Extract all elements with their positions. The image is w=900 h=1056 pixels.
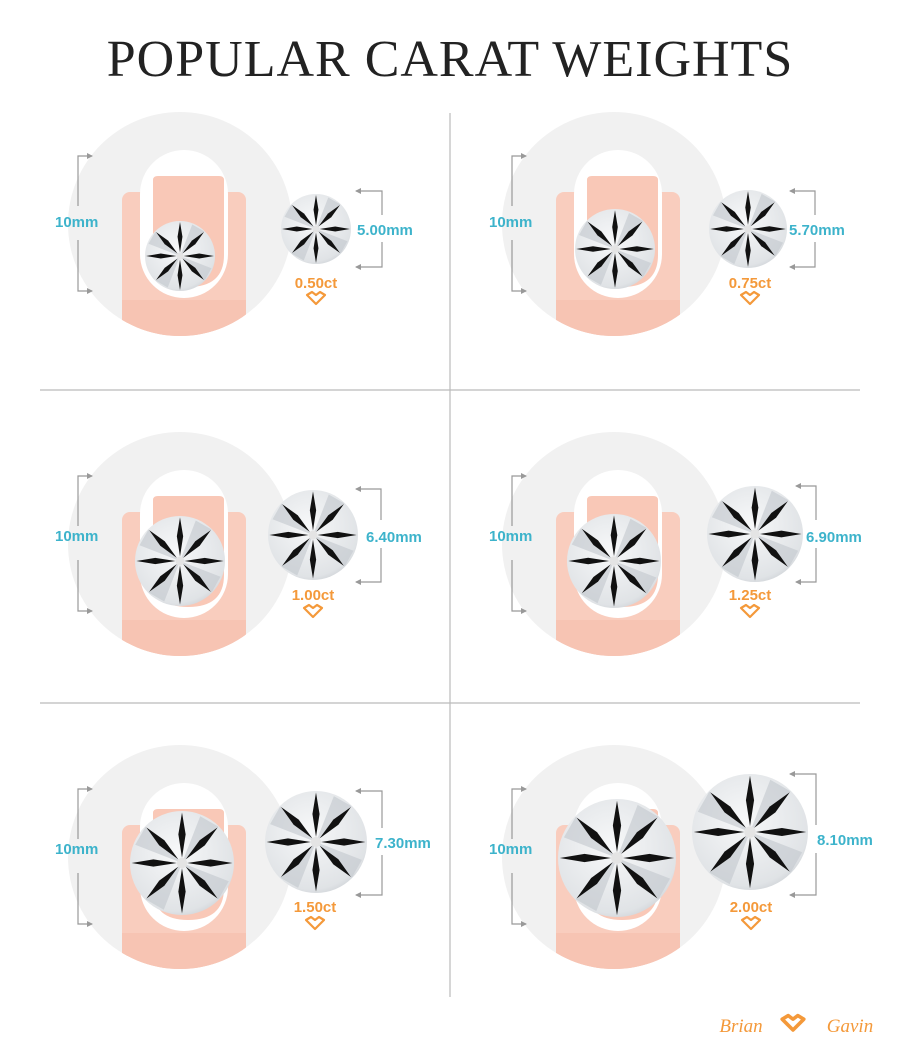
icon: heart (741, 292, 759, 304)
label: 5.00mm: 5.00mm (357, 222, 413, 239)
diamond standalone (707, 486, 803, 582)
label: 10mm: 10mm (55, 841, 98, 858)
diamond in nail (575, 209, 655, 289)
logo (719, 1016, 873, 1037)
label: 10mm: 10mm (55, 214, 98, 231)
label: 10mm: 10mm (489, 214, 532, 231)
icon: heart (306, 917, 324, 929)
size bracket (790, 774, 816, 895)
panel: 1.25ct (489, 432, 862, 662)
label: 7.30mm: 7.30mm (375, 835, 431, 852)
logo: Gavin (827, 1016, 873, 1037)
icon: heart (742, 917, 760, 929)
label: 5.70mm: 5.70mm (789, 222, 845, 239)
carat: 1.25ct: 1.25ct (729, 587, 771, 604)
size bracket (356, 191, 382, 267)
label: 10mm: 10mm (489, 528, 532, 545)
panel: 1.00ct (55, 432, 422, 662)
diamond standalone (709, 190, 787, 268)
carat: 1.50ct: 1.50ct (294, 899, 336, 916)
label: 10mm: 10mm (55, 528, 98, 545)
title: POPULAR CARAT WEIGHTS (107, 31, 793, 88)
panel: 1.50ct (55, 745, 431, 975)
label: 8.10mm: 8.10mm (817, 832, 873, 849)
diamond in nail (567, 514, 661, 608)
grid lines (40, 113, 860, 997)
diamond standalone (281, 194, 351, 264)
carat: 0.75ct: 0.75ct (729, 275, 771, 292)
label: 10mm: 10mm (489, 841, 532, 858)
carat: 2.00ct: 2.00ct (730, 899, 772, 916)
carat: 0.50ct: 0.50ct (295, 275, 337, 292)
panel: 0.75ct (489, 112, 845, 342)
diamond standalone (268, 490, 358, 580)
panel: 2.00ct (489, 745, 873, 975)
icon: heart (741, 605, 759, 617)
size bracket (356, 791, 382, 895)
diamond standalone (265, 791, 367, 893)
icon: heart (304, 605, 322, 617)
diamond in nail (558, 799, 676, 917)
icon: heart (307, 292, 325, 304)
diamond in nail (135, 516, 225, 606)
size bracket (796, 486, 816, 582)
size bracket (790, 191, 815, 267)
diamond in nail (130, 811, 234, 915)
label: 6.90mm: 6.90mm (806, 529, 862, 546)
label: 6.40mm: 6.40mm (366, 529, 422, 546)
diamond standalone (692, 774, 808, 890)
carat: 1.00ct: 1.00ct (292, 587, 334, 604)
panel: 0.50ct (55, 112, 413, 342)
logo: Brian (719, 1016, 763, 1037)
diamond in nail (145, 221, 215, 291)
size bracket (356, 489, 381, 582)
